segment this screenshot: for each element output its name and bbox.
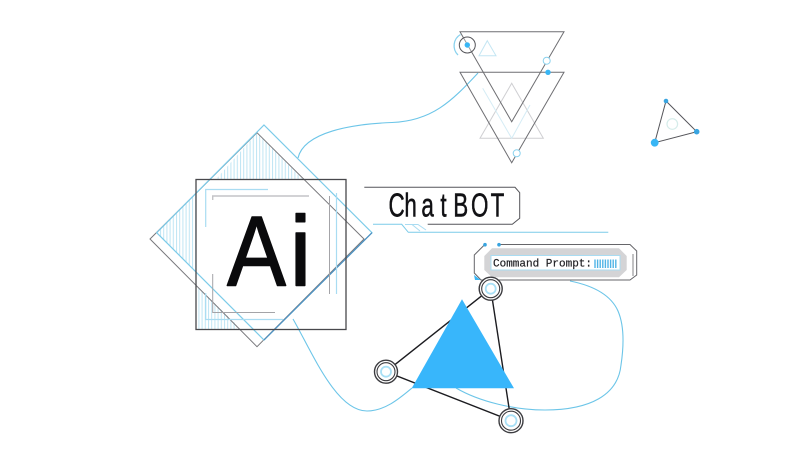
Command Prompt panel xyxy=(474,243,637,280)
small corner triangle xyxy=(474,275,480,280)
upper inverted triangle xyxy=(460,32,564,122)
pale blue chevron xyxy=(483,88,530,138)
grey pill xyxy=(484,248,627,277)
Ai text: A xyxy=(227,196,286,306)
node: top xyxy=(479,277,502,300)
panel dots xyxy=(483,243,487,246)
black square xyxy=(196,180,346,330)
Command Prompt text: Command Prompt: xyxy=(493,258,592,270)
connector curve: lower right xyxy=(456,281,623,410)
circuit line xyxy=(373,224,608,232)
top triangle cluster xyxy=(454,32,564,163)
ChatBOT text: ChatBOT xyxy=(388,186,504,224)
lower inverted triangle xyxy=(460,72,564,163)
panel right inner mark xyxy=(632,254,634,276)
small triangle top right xyxy=(651,99,700,147)
inner brackets xyxy=(206,190,336,320)
label frame xyxy=(364,187,520,224)
network links xyxy=(386,289,511,421)
panel outline xyxy=(474,244,637,280)
input box xyxy=(491,256,620,270)
node: left xyxy=(374,360,398,383)
target node xyxy=(454,34,475,55)
connector curve: lower left xyxy=(293,319,412,411)
progress bars xyxy=(595,260,616,268)
small pale blue triangle xyxy=(479,41,496,56)
connector curve: upper xyxy=(298,73,478,158)
grey diamond xyxy=(150,133,364,347)
blue triangle xyxy=(412,299,514,388)
Ai logo emblem xyxy=(150,125,372,347)
hatching xyxy=(157,133,302,329)
small white nodes xyxy=(543,57,550,64)
network triangle xyxy=(374,277,523,433)
blue dot xyxy=(545,70,551,75)
ChatBOT label xyxy=(364,186,520,224)
lower right blue-grey edge xyxy=(264,233,372,340)
blue diamond xyxy=(157,125,372,340)
node: bottom xyxy=(499,409,523,433)
pale triangle xyxy=(480,83,543,138)
Ai text: i xyxy=(290,196,312,306)
